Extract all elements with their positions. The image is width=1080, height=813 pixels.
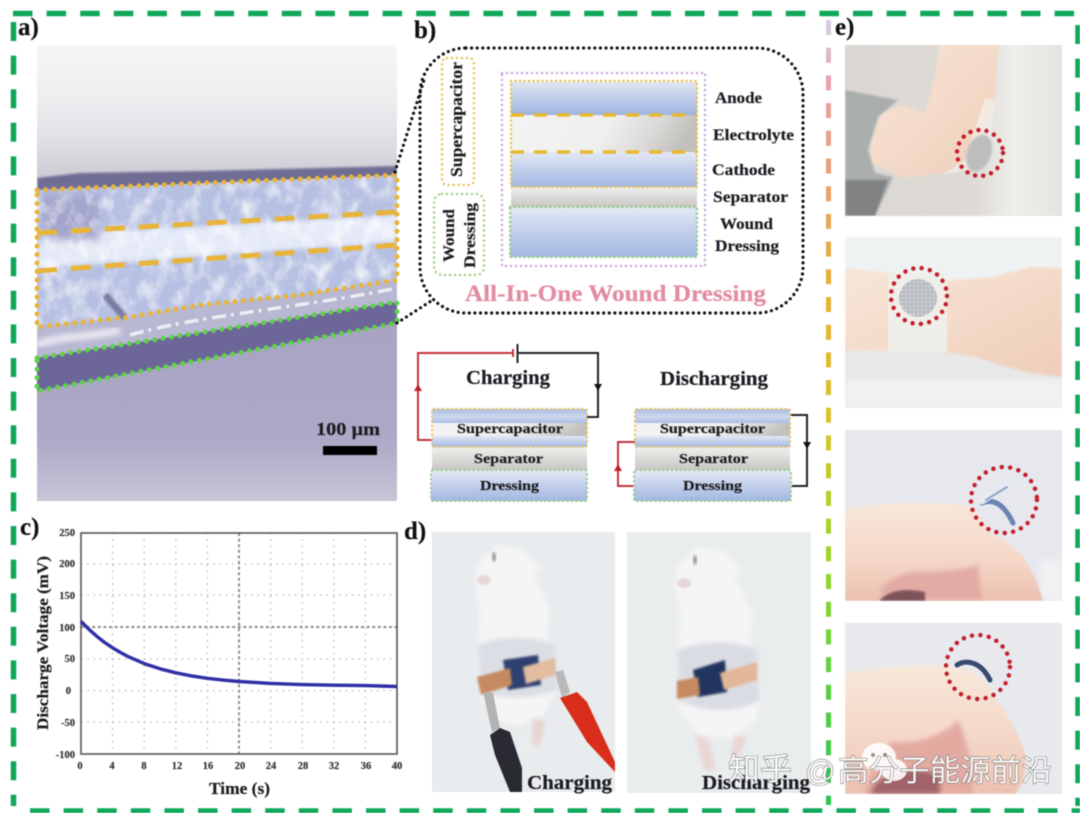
highlight circle	[891, 268, 947, 324]
supercapacitor region outline	[37, 175, 397, 327]
y axis tick labels: -100	[56, 750, 75, 761]
zoom callout outline	[395, 48, 803, 323]
photo caption: discharging: Discharging	[702, 772, 810, 794]
finger	[845, 665, 1026, 794]
discharging circuit: Separator	[679, 452, 748, 467]
finger	[845, 503, 1043, 601]
charging circuit: Supercapacitor	[457, 422, 563, 437]
scale bar: 100 µm	[316, 419, 380, 439]
layer names: Cathode	[712, 162, 775, 179]
panel e: elbow photo	[845, 45, 1062, 216]
label a: a)	[18, 14, 39, 41]
x axis tick labels: 36	[361, 761, 371, 772]
highlight circle	[946, 635, 1010, 699]
panel a: cross-section micrograph	[37, 45, 397, 501]
layer names: Dressing	[715, 238, 779, 255]
copper tape and blue device	[477, 655, 556, 695]
y axis tick labels: 250	[59, 528, 75, 539]
panel d: discharging mouse photo	[627, 532, 811, 793]
transparent dressing	[942, 98, 995, 175]
charging circuit: Charging	[466, 367, 550, 389]
bent dressing	[982, 484, 1013, 523]
sleeve	[845, 90, 898, 216]
x axis tick labels: 12	[172, 761, 182, 772]
x axis tick labels: 20	[235, 761, 245, 772]
icon: wechat bubbles	[862, 743, 907, 781]
voltage decay curve	[81, 621, 397, 686]
supercapacitor tag	[442, 58, 474, 185]
label c: c)	[20, 514, 39, 541]
label d: d)	[404, 518, 426, 545]
label b: b)	[414, 17, 436, 44]
discharging circuit: Discharging	[660, 368, 768, 390]
x axis tick labels: 32	[329, 761, 339, 772]
arm	[845, 267, 1062, 377]
panel c: discharge voltage line chart	[35, 528, 402, 798]
discharging circuit	[614, 368, 811, 501]
layer names: Wound	[720, 216, 773, 233]
wound dressing tag: Dressing	[462, 203, 479, 268]
watermark	[728, 743, 1052, 788]
y axis tick labels	[56, 528, 75, 761]
x axis tick labels: 4	[109, 761, 115, 772]
dressing strip	[888, 273, 947, 352]
charging circuit: Dressing	[480, 479, 539, 494]
x axis tick labels: 0	[77, 761, 83, 772]
panel d: charging mouse photo	[432, 532, 615, 792]
y axis title: Discharge Voltage (mV)	[35, 556, 52, 730]
red alligator clip	[555, 670, 615, 772]
gradient dashed divider	[826, 20, 831, 805]
watermark: 高分子能源前沿	[838, 755, 1052, 788]
y axis tick labels: 50	[64, 654, 75, 665]
mouse body	[675, 547, 762, 770]
charging circuit	[414, 344, 602, 501]
layer dashes	[37, 212, 397, 271]
y axis tick labels: 0	[66, 686, 71, 697]
x axis tick labels: 8	[141, 761, 147, 772]
y axis tick labels: -50	[61, 718, 75, 729]
charging circuit: Separator	[474, 452, 543, 467]
flattened dressing	[957, 662, 990, 680]
layer names: Anode	[715, 90, 762, 107]
discharging circuit: Dressing	[683, 479, 742, 494]
layer names: Electrolyte	[713, 127, 794, 144]
panel e: flat finger photo	[845, 623, 1062, 794]
x axis tick labels: 24	[266, 761, 277, 772]
y axis tick labels: 150	[59, 591, 75, 602]
copper tape and blue device	[677, 660, 757, 699]
discharging circuit: Supercapacitor	[660, 422, 765, 437]
black alligator clip	[483, 692, 522, 792]
x axis tick labels: 16	[203, 761, 213, 772]
x axis tick labels: 28	[298, 761, 308, 772]
panel b: all-in-one dressing schematic	[395, 48, 803, 323]
wound dressing tag: Wound	[441, 209, 458, 262]
y axis tick labels: 100	[59, 623, 75, 634]
scale bar	[316, 419, 380, 455]
layer names	[712, 90, 794, 255]
label e: e)	[835, 14, 854, 41]
schematic title: All-In-One Wound Dressing	[465, 281, 767, 306]
panel e: wrist photo	[845, 237, 1062, 408]
supercapacitor tag: Supercapacitor	[447, 62, 466, 177]
wound dressing region outline	[37, 302, 397, 391]
x axis tick labels: 40	[392, 761, 402, 772]
mouse body	[476, 546, 557, 746]
x axis tick labels	[77, 761, 402, 772]
photo caption: charging: Charging	[527, 772, 612, 794]
arm	[870, 45, 998, 178]
panel e: bent finger photo	[845, 430, 1062, 601]
watermark: @	[805, 755, 835, 788]
wound dressing tag	[434, 194, 484, 275]
layer names: Separator	[713, 189, 788, 206]
x axis title: Time (s)	[209, 779, 270, 798]
watermark: 知乎	[728, 752, 792, 787]
y axis tick labels: 200	[59, 559, 75, 570]
highlight circle	[971, 467, 1037, 533]
layer stack	[502, 73, 705, 266]
highlight circle	[957, 130, 1003, 176]
